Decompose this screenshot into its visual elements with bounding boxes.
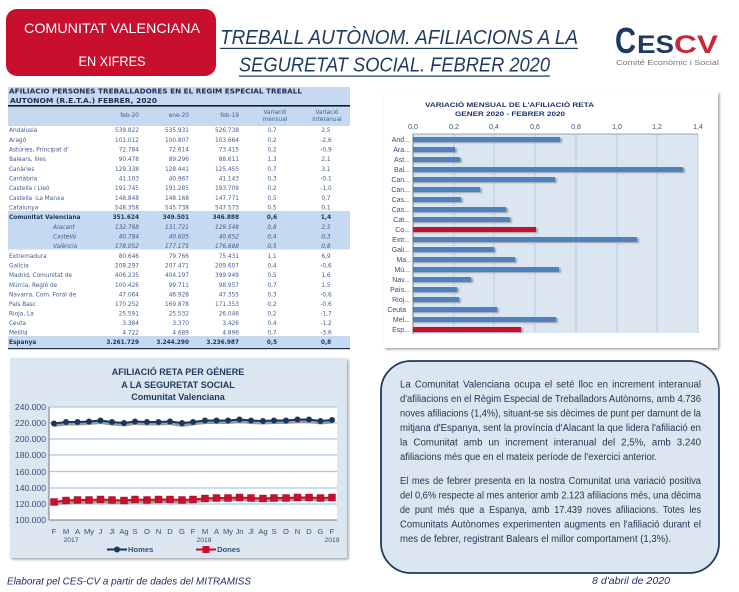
category labels: Can... (391, 187, 410, 194)
table column headers: mensual (263, 117, 288, 123)
paragraph 1: noves afiliacions (1,4%), situant-se sis dècimes de punt per damunt de la (400, 408, 701, 420)
table rows: 26.046 (219, 312, 239, 318)
logo: CESCV (615, 20, 720, 67)
table rows: 3,1 (321, 167, 331, 173)
top axis labels: 1,0 (612, 124, 622, 131)
plot area (49, 407, 337, 520)
table rows: 100.807 (165, 138, 189, 144)
table rows: 171.353 (215, 302, 239, 308)
table rows: 0,2 (267, 148, 277, 154)
y axis labels (15, 402, 46, 525)
table rows: 539.822 (115, 128, 139, 134)
table rows: 191.285 (165, 186, 189, 192)
x axis labels: My (84, 527, 94, 536)
paragraph 1: d'afiliacions en el Règim Especial de Treballadors Autònoms, amb 4.736 (400, 394, 701, 405)
category labels: And... (392, 137, 410, 144)
table rows: 526.738 (215, 128, 239, 134)
x axis labels: J (99, 527, 103, 536)
panel: monthly variation bar chart (384, 92, 718, 348)
category labels: Rioj... (392, 297, 410, 304)
table rows: -0,6 (320, 292, 332, 298)
table rows: Aragó (9, 137, 27, 144)
table rows (9, 128, 332, 346)
title (220, 26, 578, 77)
table rows: 406.235 (115, 273, 139, 279)
table rows: Ceuta (9, 321, 27, 327)
x axis labels: O (283, 527, 289, 536)
paragraph 1: la Comunitat amb un increment interanual del 2,5%, amb 3.240 (400, 438, 701, 448)
table rows: 25.532 (169, 312, 189, 318)
table column headers: feb-20 (120, 113, 139, 119)
badge: Comunitat Valenciana en xifres: EN XIFRES (78, 53, 146, 69)
table rows: 3.244.290 (156, 340, 189, 346)
top axis labels: 1,4 (693, 124, 703, 131)
table rows: 101.012 (115, 138, 139, 144)
category labels: Cat... (393, 217, 410, 224)
y axis labels: 140.000 (15, 483, 46, 493)
x axis labels: D (306, 527, 312, 536)
table rows: 147.771 (215, 196, 239, 202)
table rows: 0,7 (321, 196, 331, 202)
x axis labels: N (156, 527, 161, 536)
top axis labels: 0,4 (489, 124, 499, 131)
table rows: -1,0 (320, 186, 332, 192)
table rows: 0,2 (267, 312, 277, 318)
table rows: 0,7 (267, 283, 277, 289)
table rows: 4.722 (122, 330, 139, 336)
bar chart title: GENER 2020 - FEBRER 2020 (455, 111, 565, 118)
bars (413, 137, 683, 332)
bar chart title: VARIACIÓ MENSUAL DE L'AFILIACIÓ RETA (425, 100, 594, 109)
table rows: 129.338 (115, 167, 139, 173)
table rows: 0,1 (321, 206, 331, 212)
series: Dones (50, 494, 336, 506)
top axis labels: 1,2 (652, 124, 662, 131)
y axis labels: 180.000 (15, 450, 46, 460)
title: SEGURETAT SOCIAL. FEBRER 2020 (239, 54, 550, 76)
table rows: 3.384 (122, 321, 139, 327)
table column headers: feb-19 (220, 113, 239, 119)
table rows: Castella i Lleó (9, 185, 50, 192)
table rows: 89.296 (169, 157, 189, 163)
category labels: Extr... (392, 237, 410, 244)
table rows: Extremadura (9, 254, 47, 260)
category labels: Ara... (393, 147, 410, 154)
x axis labels: N (295, 527, 300, 536)
table rows: 40.605 (169, 234, 189, 240)
table rows: -1,7 (320, 312, 332, 318)
table title (9, 88, 303, 105)
table rows: 545.738 (165, 206, 189, 212)
x axis labels: G (318, 527, 324, 536)
paragraph 2: Comunitats Autònomes experimenten augments en l'afiliació durant el (400, 520, 701, 530)
top axis labels: 0,2 (449, 124, 459, 131)
category labels: Cas... (392, 207, 410, 214)
table rows: 1,5 (321, 283, 331, 289)
table rows: 169.878 (165, 302, 189, 308)
table column headers: Variació (316, 109, 339, 116)
table rows: Melilla (9, 330, 28, 336)
logo: CESCV: CV (674, 31, 718, 59)
table rows: 0,3 (321, 234, 331, 240)
table rows: 1,4 (321, 215, 331, 221)
top axis labels: 0,8 (571, 124, 581, 131)
table rows: 90.478 (119, 157, 139, 163)
category labels (387, 137, 412, 334)
y axis labels: 120.000 (15, 499, 46, 509)
panel: affiliation by gender line chart (10, 358, 347, 558)
badge: Comunitat Valenciana en xifres: COMUNITAT VALENCIANA (24, 20, 201, 36)
table rows: 2,5 (321, 128, 331, 134)
table rows: 0,8 (321, 340, 331, 346)
table rows: 47.064 (119, 292, 139, 298)
source note: Elaborat pel CES-CV a partir de dades del MITRAMISS (7, 576, 251, 588)
table rows: Cantàbria (9, 176, 38, 182)
legend: Homes (128, 545, 153, 554)
table rows: 0,5 (267, 244, 277, 250)
logo: CESCV: C (615, 20, 636, 61)
table rows: -1,2 (320, 321, 332, 327)
highlight band: Comunitat Valenciana (8, 211, 350, 250)
panel: affiliation table (8, 87, 350, 349)
table rows: 41.143 (219, 176, 239, 182)
table rows: -0,6 (320, 302, 332, 308)
table rows: 40.967 (169, 176, 189, 182)
paragraph 1: La Comunitat Valenciana ocupa el seté lloc en increment interanual (400, 380, 701, 390)
category labels: Mel... (393, 317, 410, 324)
table column headers: interanual (312, 117, 342, 123)
table rows: Balears, Illes (9, 157, 46, 163)
title: TREBALL AUTÒNOM. AFILIACIONS A LA (220, 26, 578, 49)
table rows: Andalusia (9, 128, 38, 134)
x axis labels: M (202, 527, 208, 536)
badge: Comunitat Valenciana en xifres (6, 9, 216, 76)
table rows: 0,7 (267, 167, 277, 173)
x axis labels: 2018 (196, 537, 212, 544)
top axis labels (408, 124, 703, 131)
table rows: 128.441 (165, 167, 189, 173)
table rows: -0,1 (320, 176, 332, 182)
table rows: 0,5 (267, 273, 277, 279)
table rows: 399.949 (215, 273, 239, 279)
table rows: Rioja, La (9, 312, 34, 318)
y axis labels: 240.000 (15, 402, 46, 412)
table rows: 0,8 (267, 225, 277, 231)
y axis labels: 200.000 (15, 434, 46, 444)
table rows: -2,6 (320, 138, 332, 144)
table rows: 103.664 (215, 138, 239, 144)
paragraph 2: del 0,6% respecte al mes anterior amb 2.123 afiliacions més, una dècima (400, 490, 701, 502)
table rows: 72.614 (169, 148, 189, 154)
series: Homes (51, 416, 335, 426)
category labels: Can... (391, 177, 410, 184)
table rows: 208.297 (115, 264, 139, 270)
table rows: 2,1 (321, 157, 331, 163)
table rows: Astúries, Principat d' (9, 146, 69, 154)
category labels: Nav... (392, 277, 410, 284)
paragraph 1: afiliacions més que en el mateix període de l'exercici anterior. (400, 452, 657, 463)
table rows: -0,6 (320, 264, 332, 270)
table rows: 0,8 (321, 244, 331, 250)
table rows: 191.745 (115, 186, 139, 192)
line chart title: Comunitat Valenciana (131, 392, 226, 402)
table rows: 0,7 (267, 128, 277, 134)
paragraph 2: de punt més que a Espanya, amb 17.439 noves afiliacions. Totes les (400, 505, 701, 516)
table rows: 3.370 (172, 321, 189, 327)
category labels: Mú... (394, 267, 410, 274)
table column headers (120, 109, 342, 123)
x axis labels: 2017 (63, 537, 79, 544)
highlight band: Espanya (8, 336, 350, 348)
table column headers: ene-20 (169, 113, 189, 119)
x axis labels: F (330, 527, 335, 536)
category labels: Cas... (392, 197, 410, 204)
table rows: 88.611 (219, 157, 239, 163)
date: 8 d'abril de 2020 (592, 576, 670, 587)
table rows: 1,6 (321, 273, 331, 279)
table rows: Comunitat Valenciana (9, 215, 81, 221)
table rows: 80.646 (119, 254, 139, 260)
category labels: Ceuta (387, 307, 406, 314)
table rows: 98.957 (219, 283, 239, 289)
top axis labels: 0,6 (530, 124, 540, 131)
x axis labels: G (179, 527, 185, 536)
x axis labels: 2019 (324, 537, 340, 544)
table rows: 79.766 (169, 254, 189, 260)
table rows: 209.607 (215, 264, 239, 270)
paragraph 2: mes de febrer, registrant Balears el millor comportament (1,3%). (400, 534, 671, 545)
x axis labels: My (223, 527, 233, 536)
paragraph 2: El mes de febrer presenta en la nostra Comunitat una variació positiva (400, 476, 701, 487)
table rows: 0,4 (267, 234, 277, 240)
table rows: 25.591 (119, 312, 139, 318)
x axis labels: Jn (235, 527, 244, 536)
table rows: Madrid, Comunitat de (9, 273, 72, 279)
bar chart title (425, 100, 594, 118)
y axis labels: 220.000 (15, 418, 46, 428)
table rows: 1,3 (267, 157, 277, 163)
table rows: 207.471 (165, 264, 189, 270)
table rows: 131.721 (165, 225, 189, 231)
table rows: Galícia (9, 262, 29, 270)
category labels: Bal... (394, 167, 410, 174)
table rows: 0,4 (267, 264, 277, 270)
x axis labels: A (75, 527, 81, 536)
x axis labels: Ag (119, 527, 129, 536)
panel: commentary text (381, 361, 719, 573)
x axis labels: Ag (258, 527, 268, 536)
table rows: 351.624 (113, 215, 139, 221)
table rows: 3.236.987 (206, 340, 239, 346)
line chart title: AFILIACIÓ RETA PER GÉNERE (112, 366, 244, 377)
x axis labels: F (191, 527, 196, 536)
x axis labels: M (63, 527, 69, 536)
table rows: 193.709 (215, 186, 239, 192)
category labels: Esp... (392, 327, 410, 334)
table rows: 129.548 (215, 225, 239, 231)
table rows: Navarra, Com. Foral de (9, 292, 76, 298)
table rows: 73.415 (219, 148, 239, 154)
table rows: Catalunya (9, 206, 39, 212)
x axis labels: S (132, 527, 138, 536)
table rows: Alacant (52, 225, 76, 231)
logo: CESCV: ES (637, 31, 674, 59)
table header band (8, 87, 350, 126)
table rows: 1,1 (267, 254, 277, 260)
table rows: -3,6 (320, 330, 332, 336)
table rows: Canàries (9, 166, 34, 173)
table rows: 4.896 (222, 330, 239, 336)
legend: Dones (217, 545, 240, 554)
table rows: 3.426 (222, 321, 239, 327)
y axis labels: 100.000 (15, 515, 46, 525)
x axis labels: F (52, 527, 57, 536)
x axis labels: Jl (248, 527, 254, 536)
table rows: 3.261.729 (106, 340, 139, 346)
table rows: 177.175 (165, 244, 189, 250)
table rows: 40.784 (119, 234, 139, 240)
paragraph 1 (400, 380, 701, 463)
table rows: 346.888 (213, 215, 239, 221)
category labels: Ast... (394, 157, 410, 164)
table rows: 535.931 (165, 128, 189, 134)
x axis labels (52, 527, 340, 544)
table rows: 132.788 (115, 225, 139, 231)
x axis labels: D (167, 527, 173, 536)
table rows: 0,5 (267, 196, 277, 202)
table rows: 47.355 (219, 292, 239, 298)
category labels: País... (390, 287, 410, 294)
paragraph 1: mitjana d'Espanya, sent la província d'Alacant la que lidera l'afiliació en (400, 423, 701, 434)
table rows: 4.689 (172, 330, 189, 336)
table column headers: Variació (264, 109, 287, 116)
table rows: 40.652 (219, 234, 239, 240)
category labels: Co... (395, 227, 410, 234)
y axis labels: 160.000 (15, 467, 46, 477)
category labels: Gali... (392, 247, 410, 254)
x axis labels: A (214, 527, 220, 536)
table rows: 170.252 (115, 302, 139, 308)
table rows: Castella -La Manxa (9, 196, 64, 202)
table rows: 176.688 (215, 244, 239, 250)
table rows: 0,2 (267, 302, 277, 308)
x axis labels: O (144, 527, 150, 536)
plot area (413, 134, 698, 333)
table rows: 75.431 (219, 254, 239, 260)
table rows: 125.455 (215, 167, 239, 173)
table rows: 349.501 (163, 215, 189, 221)
table rows: 99.711 (169, 283, 189, 289)
table rows: Castelló (53, 234, 77, 240)
table rows: Espanya (9, 340, 36, 346)
table rows: 0,5 (267, 340, 277, 346)
x axis labels: Jl (109, 527, 115, 536)
table title: AFILIACIO PERSONES TREBALLADORES EN EL REGIM ESPECIAL TREBALL (9, 88, 303, 96)
line chart title: A LA SEGURETAT SOCIAL (121, 380, 235, 390)
table rows: 46.928 (169, 292, 189, 298)
logo: CESCV: Comité Econòmic i Social (616, 60, 720, 67)
table rows: 548.358 (115, 206, 139, 212)
line chart title (112, 366, 244, 402)
paragraph 2 (400, 476, 701, 545)
table rows: 547.573 (215, 206, 239, 212)
table rows: 0,5 (267, 206, 277, 212)
table rows: 0,2 (267, 186, 277, 192)
table rows: Múrcia, Regió de (9, 282, 58, 289)
top axis labels: 0,0 (408, 124, 418, 131)
table rows: 0,2 (267, 138, 277, 144)
legend (107, 545, 240, 554)
table rows: 404.197 (165, 273, 189, 279)
table rows: 0,7 (267, 330, 277, 336)
table rows: 0,6 (267, 215, 277, 221)
table rows: 41.103 (119, 176, 139, 182)
table rows: 148.168 (165, 196, 189, 202)
table rows: 0,4 (267, 321, 277, 327)
table rows: 6,9 (321, 254, 331, 260)
x axis labels: S (271, 527, 277, 536)
table rows: 0,3 (267, 176, 277, 182)
table rows: 72.784 (119, 148, 139, 154)
category labels: Ma... (396, 257, 412, 264)
table rows: València (53, 243, 78, 250)
table title: AUTONOM (R.E.T.A.) FEBRER, 2020 (10, 97, 157, 105)
table rows: 0,3 (267, 292, 277, 298)
table rows: País Basc (9, 301, 36, 308)
bar shadows (413, 138, 685, 333)
table rows: 148.848 (115, 196, 139, 202)
table rows: -0,9 (320, 148, 332, 154)
table rows: 100.426 (115, 283, 139, 289)
table rows: 2,5 (321, 225, 331, 231)
table rows: 178.052 (115, 244, 139, 250)
